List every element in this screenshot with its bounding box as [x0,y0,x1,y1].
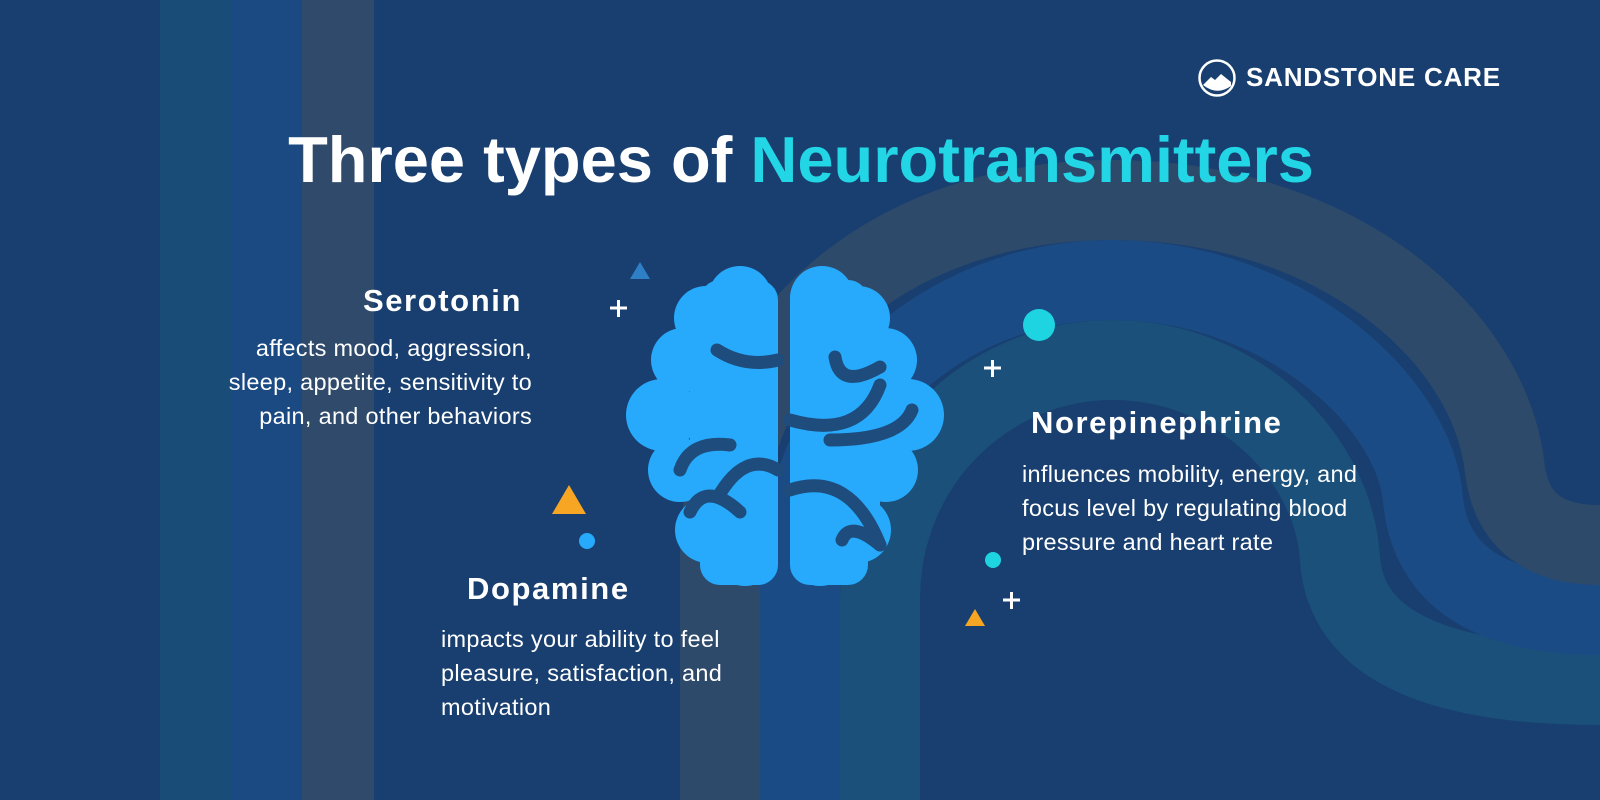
serotonin text block: pain, and other behaviors [259,403,532,429]
logo: SANDSTONE CARE [1246,62,1501,92]
dopamine text block: pleasure, satisfaction, and [441,660,722,686]
serotonin text block: sleep, appetite, sensitivity to [229,369,532,395]
norepinephrine text block: pressure and heart rate [1022,529,1273,555]
dopamine text block: Dopamine [467,571,630,606]
serotonin text block: Serotonin [363,283,522,318]
dopamine text block [441,571,722,720]
norepinephrine text block [1022,405,1357,555]
serotonin text block [229,283,532,429]
title: Three types of Neurotransmitters [288,123,1314,196]
dopamine text block: impacts your ability to feel [441,626,720,652]
norepinephrine text block: influences mobility, energy, and [1022,461,1357,487]
logo [1198,59,1501,97]
norepinephrine text block: focus level by regulating blood [1022,495,1347,521]
icon: brain [626,266,944,586]
serotonin text block: affects mood, aggression, [256,335,532,361]
norepinephrine text block: Norepinephrine [1031,405,1282,440]
dopamine text block: motivation [441,694,551,720]
